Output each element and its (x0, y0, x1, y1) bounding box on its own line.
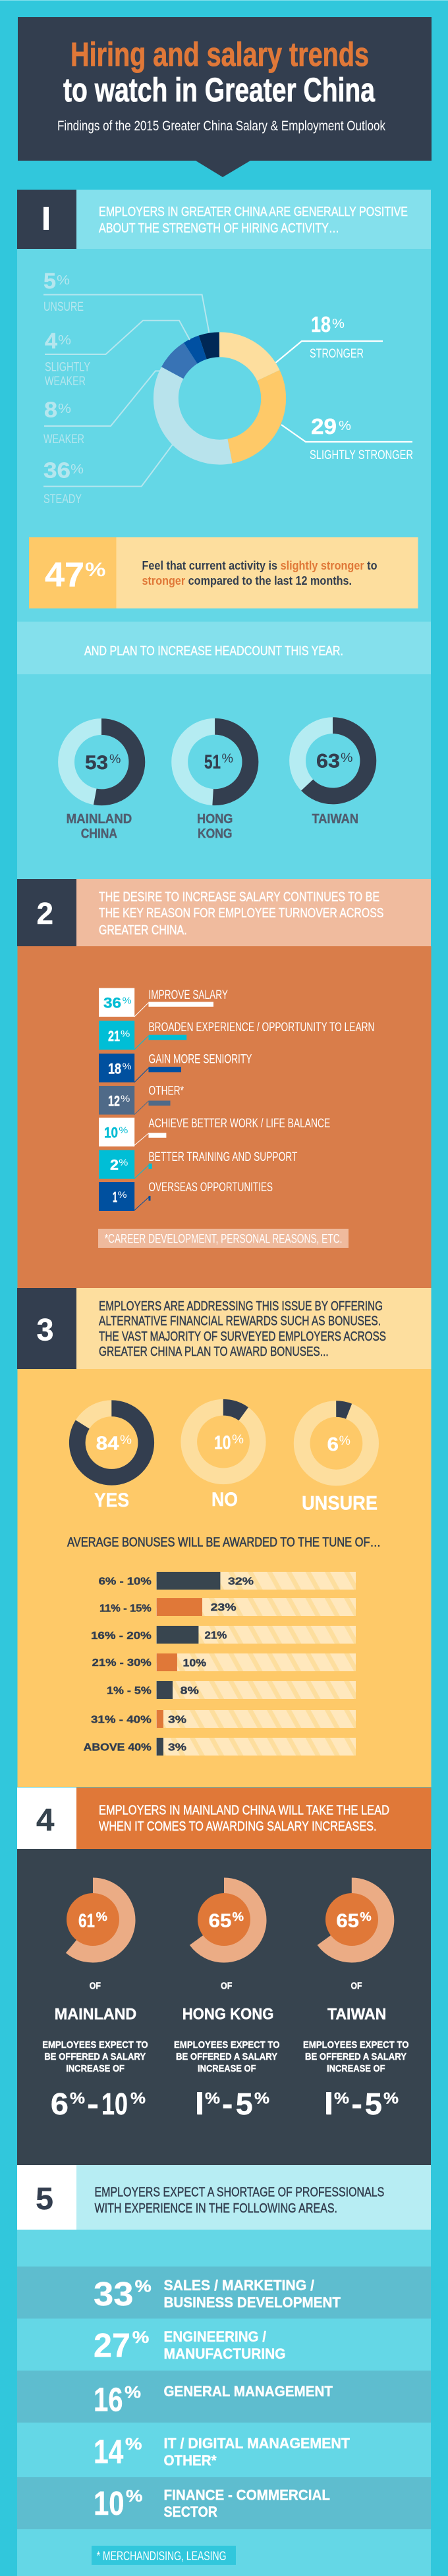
donut: no 10%: NO (211, 1489, 238, 1511)
section 4 heading: 4 (36, 1802, 54, 1837)
title: Hiring and salary trends (70, 36, 369, 73)
bar: 31% - 40%: 3% (168, 1715, 186, 1726)
column: Mainland: % (130, 2090, 146, 2107)
callout: 5% unsure: % (57, 273, 70, 288)
column: Taiwan: 1 (326, 2087, 331, 2121)
bar: 16% - 20%: 21% (204, 1630, 227, 1642)
section 2 heading (17, 879, 431, 946)
callout: 4% slightly weaker: % (58, 333, 71, 348)
callout: 5% unsure (43, 269, 209, 333)
bar: 21% - 30%: 10% (183, 1658, 206, 1669)
bar: 6% - 10%: 32% (228, 1576, 254, 1588)
column: Taiwan: EMPLOYEES EXPECT TO (303, 2039, 409, 2051)
column: Hong Kong: EMPLOYEES EXPECT TO (174, 2039, 280, 2051)
callout: 29% slightly stronger: SLIGHTLY STRONGER (310, 448, 413, 462)
panel: section 2 employee turnover (17, 879, 431, 1288)
donut: no 10%: 10 (214, 1433, 231, 1454)
section 2 heading: GREATER CHINA. (99, 923, 187, 938)
bar item: overseas opportunities 1% (99, 1180, 273, 1211)
row: 27% engineering: ENGINEERING / (163, 2328, 266, 2345)
donut: Taiwan 63% (298, 726, 368, 826)
row: 14% IT and other: 14 (94, 2433, 124, 2471)
row: 27% engineering: MANUFACTURING (163, 2346, 286, 2362)
bar: above 40% (84, 1738, 356, 1756)
bar item: gain more seniority 18%: % (123, 1061, 132, 1071)
bar item: better training 2% (99, 1150, 297, 1179)
callout: 8% weaker: 8 (44, 397, 57, 421)
bar item: broaden experience 21%: 21 (108, 1028, 120, 1044)
row: 27% engineering (94, 2326, 286, 2364)
column: Hong Kong: 5 (236, 2087, 253, 2121)
donut: Hong Kong 51%: KONG (198, 827, 232, 842)
bar: 1% - 5% (107, 1681, 356, 1699)
bar item: improve salary 36% (99, 988, 228, 1017)
column: Hong Kong: % (232, 1910, 244, 1923)
callout: 47% stat: % (85, 559, 105, 581)
bar: 21% - 30%: 21% - 30% (92, 1657, 152, 1669)
callout: 4% slightly weaker: 4 (45, 329, 58, 353)
bar item: other 12% (99, 1083, 184, 1115)
section 4 heading (17, 1787, 431, 1849)
bar: 16% - 20%: 16% - 20% (91, 1630, 152, 1642)
title banner (18, 17, 432, 177)
bar: 6% - 10% (99, 1572, 356, 1590)
section 5 heading (17, 2165, 431, 2230)
donut: yes 84% (77, 1409, 146, 1511)
callout: 18% stronger (275, 312, 383, 363)
column: Hong Kong: HONG KONG (182, 2006, 273, 2024)
column: Hong Kong: OF (221, 1981, 232, 1992)
bar item: better training 2%: 2 (110, 1156, 119, 1173)
column: Mainland: INCREASE OF (66, 2063, 125, 2074)
column: Taiwan: TAIWAN (327, 2006, 386, 2024)
row: 16% general management (17, 2371, 431, 2423)
section 5 heading: 5 (36, 2181, 53, 2216)
callout: 29% slightly stronger: % (339, 419, 351, 433)
title (63, 36, 375, 109)
callout: 47% stat: Feel that current activity is slightly stronger to (142, 559, 377, 572)
bar item: broaden experience 21%: % (121, 1028, 130, 1038)
bar item: overseas opportunities 1%: OVERSEAS OPPORTUNITIES (149, 1180, 273, 1194)
row: 27% engineering: 27 (94, 2326, 130, 2364)
bar item: other 12%: OTHER* (149, 1083, 184, 1098)
column: Mainland: % (96, 1910, 107, 1923)
column: Taiwan: OF (350, 1981, 362, 1992)
column: Mainland (42, 1893, 148, 2121)
bar item: work life balance 10%: 10 (104, 1124, 118, 1140)
donut: yes 84%: 84 (96, 1434, 119, 1455)
row: 16% general management: GENERAL MANAGEMENT (163, 2383, 333, 2400)
bar: 21% - 30% (92, 1653, 356, 1671)
callout: 36% steady: STEADY (43, 493, 82, 506)
footnote: career development (98, 1229, 349, 1248)
row: 16% general management: % (125, 2384, 141, 2402)
column: Mainland: MAINLAND (55, 2006, 136, 2024)
donut: unsure 6% (302, 1409, 378, 1514)
callout: 47% stat: 47 (45, 556, 84, 594)
column: Mainland: - (87, 2087, 99, 2121)
bar item: overseas opportunities 1%: 1 (113, 1189, 117, 1206)
bar: 31% - 40% (91, 1710, 356, 1728)
column: Hong Kong: INCREASE OF (198, 2063, 256, 2074)
column: Mainland: % (70, 2090, 85, 2107)
callout: 36% steady: 36 (43, 458, 70, 482)
bar item: better training 2%: BETTER TRAINING AND SUPPORT (149, 1150, 297, 1164)
column: Taiwan: % (383, 2090, 399, 2107)
section 3 heading (17, 1288, 431, 1369)
column: Hong Kong: 1 (197, 2087, 202, 2121)
bar item: overseas opportunities 1%: % (118, 1189, 127, 1200)
bar item: other 12%: 12 (108, 1093, 120, 1110)
row: 10% finance: % (126, 2487, 142, 2506)
column: Hong Kong: % (254, 2090, 269, 2107)
column: Taiwan: % (334, 2090, 349, 2107)
panel: section 1 hiring activity (17, 190, 431, 879)
row: 33% sales: BUSINESS DEVELOPMENT (163, 2294, 341, 2311)
bar: 31% - 40%: 31% - 40% (91, 1715, 152, 1726)
column: Mainland: 6 (51, 2087, 69, 2121)
callout: 36% steady (43, 444, 173, 506)
donut: no 10%: % (232, 1433, 244, 1447)
bar: 11% - 15% (99, 1598, 356, 1616)
column: Taiwan: INCREASE OF (327, 2063, 385, 2074)
row: 33% sales: SALES / MARKETING / (163, 2277, 314, 2294)
callout: 5% unsure: UNSURE (43, 300, 84, 314)
callout: 18% stronger: % (332, 317, 345, 331)
donut: Mainland China 53% (67, 727, 137, 842)
row: 10% finance (17, 2477, 431, 2529)
footnote: career development: *CAREER DEVELOPMENT, PERSONAL REASONS, ETC. (105, 1232, 342, 1246)
callout: 29% slightly stronger (281, 414, 413, 462)
donut: Hong Kong 51%: HONG (197, 812, 233, 826)
panel: section 5 skills shortage (17, 2165, 431, 2576)
donut: yes 84%: YES (94, 1489, 129, 1511)
donut: unsure 6%: UNSURE (302, 1492, 378, 1514)
bar item: improve salary 36%: 36 (103, 994, 121, 1011)
row: 10% finance: SECTOR (163, 2504, 217, 2520)
row: 10% finance: FINANCE - COMMERCIAL (163, 2486, 330, 2503)
column: Mainland: 10 (101, 2087, 128, 2121)
donut: Mainland China 53%: MAINLAND (67, 812, 132, 826)
bar: 11% - 15%: 11% - 15% (99, 1603, 152, 1615)
bar: above 40%: ABOVE 40% (84, 1742, 152, 1754)
callout: 18% stronger: 18 (311, 312, 331, 336)
column: Mainland: 61 (78, 1911, 95, 1932)
section 3 heading: 3 (37, 1312, 54, 1347)
donut: Hong Kong 51%: % (221, 752, 233, 766)
column: Taiwan: 5 (365, 2087, 382, 2121)
bar item: work life balance 10%: ACHIEVE BETTER WORK / LIFE BALANCE (149, 1116, 330, 1131)
panel: section 4 salary increases (17, 1787, 431, 2165)
subheading: headcount: AND PLAN TO INCREASE HEADCOUNT THIS YEAR. (84, 643, 343, 658)
donut: unsure 6%: 6 (327, 1434, 339, 1455)
row: 33% sales (17, 2267, 431, 2319)
footnote: merchandising: * MERCHANDISING, LEASING (97, 2550, 227, 2563)
bar: 1% - 5%: 8% (181, 1686, 199, 1697)
donut: Hong Kong 51%: 51 (204, 751, 221, 773)
column: Taiwan: % (360, 1910, 372, 1923)
bar item: work life balance 10%: % (119, 1125, 128, 1135)
bar: 1% - 5%: 1% - 5% (107, 1686, 152, 1697)
section 4 heading: WHEN IT COMES TO AWARDING SALARY INCREASES. (99, 1819, 377, 1834)
column: Hong Kong: - (222, 2087, 233, 2121)
section 1 heading: ABOUT THE STRENGTH OF HIRING ACTIVITY… (99, 221, 339, 236)
column: Hong Kong: BE OFFERED A SALARY (176, 2051, 277, 2062)
donut: Mainland China 53%: % (109, 753, 121, 766)
chart heading: AVERAGE BONUSES WILL BE AWARDED TO THE TUNE OF… (67, 1535, 381, 1549)
column: Hong Kong: 65 (209, 1911, 231, 1932)
panel: section 3 bonuses (17, 1288, 431, 1787)
callout: 47% stat (29, 537, 418, 608)
bar: 6% - 10%: 6% - 10% (99, 1576, 152, 1588)
bar: 11% - 15%: 23% (211, 1602, 237, 1613)
row: 16% general management: 16 (94, 2381, 123, 2419)
bar item: gain more seniority 18%: GAIN MORE SENIORITY (149, 1052, 252, 1067)
donut: Hong Kong 51% (180, 726, 250, 842)
column: Mainland: OF (90, 1981, 101, 1992)
row: 14% IT and other (94, 2433, 350, 2471)
bar item: gain more seniority 18%: 18 (108, 1061, 121, 1077)
callout: 47% stat: stronger compared to the last 12 months. (142, 574, 352, 587)
column: Taiwan: 65 (336, 1911, 359, 1932)
donut: Taiwan 63%: 63 (316, 751, 340, 772)
callout: 4% slightly weaker: WEAKER (45, 375, 86, 389)
bar item: other 12%: % (121, 1093, 130, 1104)
bar item: gain more seniority 18% (99, 1052, 252, 1083)
callout: 4% slightly weaker: SLIGHTLY (45, 360, 90, 374)
donut: Taiwan 63%: % (341, 751, 353, 765)
callout: 8% weaker: WEAKER (43, 433, 84, 446)
column: Mainland: BE OFFERED A SALARY (44, 2051, 146, 2062)
footnote: merchandising (92, 2546, 236, 2565)
row: 10% finance: 10 (94, 2484, 125, 2522)
section 2 heading: THE DESIRE TO INCREASE SALARY CONTINUES TO BE (99, 889, 379, 904)
callout: 36% steady: % (70, 462, 84, 477)
donut: unsure 6%: % (339, 1434, 350, 1448)
section 1 heading: 1 (43, 202, 49, 237)
column: Taiwan: - (351, 2087, 362, 2121)
bar: above 40%: 3% (168, 1742, 186, 1754)
row: 33% sales: % (135, 2277, 152, 2295)
callout: 4% slightly weaker (45, 321, 190, 389)
bar: 16% - 20% (91, 1626, 356, 1644)
section 5 heading: WITH EXPERIENCE IN THE FOLLOWING AREAS. (95, 2201, 337, 2216)
section 1 heading (17, 190, 431, 249)
bar item: better training 2%: % (119, 1157, 128, 1167)
column: Taiwan (303, 1893, 409, 2121)
column: Hong Kong: % (205, 2090, 220, 2107)
row: 14% IT and other: % (125, 2435, 142, 2454)
donut: Taiwan 63%: TAIWAN (312, 812, 358, 826)
donut chart: hiring strength (166, 344, 273, 452)
column: Taiwan: BE OFFERED A SALARY (305, 2051, 406, 2062)
column: Hong Kong (174, 1893, 280, 2121)
row: 33% sales: 33 (94, 2275, 133, 2313)
donut: Mainland China 53%: CHINA (81, 827, 117, 842)
callout: 8% weaker: % (58, 402, 71, 416)
row: 14% IT and other: OTHER* (163, 2452, 217, 2469)
bar item: work life balance 10% (99, 1116, 330, 1146)
bar item: improve salary 36%: % (123, 995, 132, 1006)
row: 14% IT and other: IT / DIGITAL MANAGEMENT (163, 2435, 350, 2452)
subheading: headcount (17, 622, 431, 674)
donut: no 10% (189, 1407, 258, 1511)
section 3 heading: GREATER CHINA PLAN TO AWARD BONUSES... (99, 1345, 329, 1359)
bar item: improve salary 36%: IMPROVE SALARY (149, 988, 228, 1002)
callout: 5% unsure: 5 (43, 269, 56, 293)
bar chart: average bonuses (84, 1572, 356, 1756)
donut: yes 84%: % (120, 1434, 132, 1447)
section 2 heading: 2 (37, 896, 53, 930)
bar item: broaden experience 21% (99, 1020, 374, 1050)
row: 27% engineering: % (132, 2328, 149, 2347)
callout: 8% weaker (43, 371, 161, 446)
callout: 18% stronger: STRONGER (310, 347, 364, 361)
column: Mainland: EMPLOYEES EXPECT TO (42, 2039, 148, 2051)
section 5 heading: EMPLOYERS EXPECT A SHORTAGE OF PROFESSIONALS (95, 2185, 384, 2199)
donut: Mainland China 53%: 53 (85, 752, 108, 774)
callout: 29% slightly stronger: 29 (311, 414, 337, 439)
